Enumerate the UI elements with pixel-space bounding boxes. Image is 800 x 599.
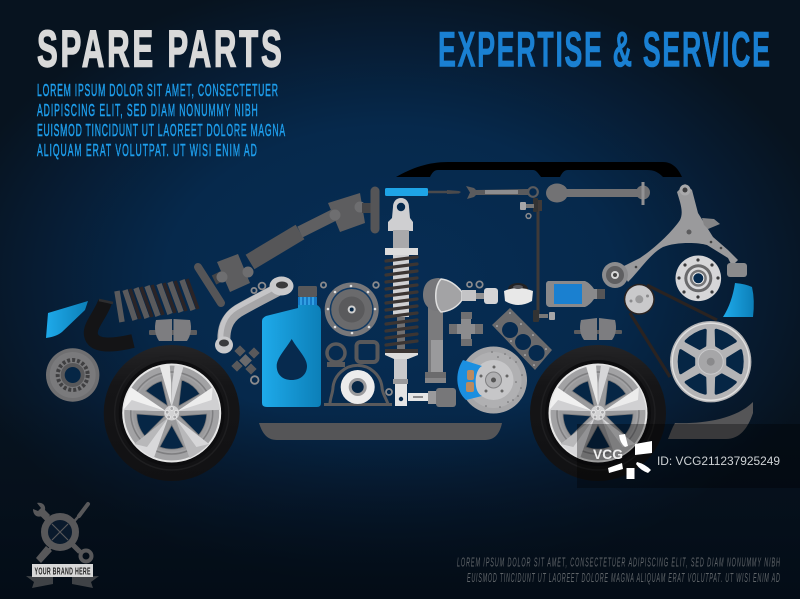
brake pad left bbox=[149, 319, 197, 341]
screwdriver bbox=[385, 188, 461, 196]
brand logo: YOUR BRAND HERE bbox=[34, 564, 91, 577]
brake pad right bbox=[574, 318, 622, 340]
control arm bbox=[602, 184, 747, 288]
wrench bbox=[466, 186, 538, 199]
pitman arm bbox=[215, 276, 294, 354]
clutch disc bbox=[325, 282, 379, 336]
bearing left bbox=[46, 348, 99, 402]
radiator hose bbox=[91, 300, 133, 345]
watermark bbox=[577, 424, 800, 488]
drive belt bbox=[630, 285, 717, 377]
oil bottle bbox=[262, 286, 321, 407]
shock absorber bbox=[385, 198, 418, 406]
intro text block: ADIPISCING ELIT, SED DIAM NONUMMY NIBH bbox=[37, 99, 258, 120]
brake disc and caliper bbox=[457, 346, 527, 414]
intro text block bbox=[37, 79, 286, 160]
bearing support bbox=[324, 365, 392, 406]
brand logo bbox=[26, 503, 99, 588]
coil spring bbox=[117, 279, 198, 322]
head gasket bbox=[492, 308, 552, 370]
footer text: EUISMOD TINCIDUNT UT LAOREET DOLORE MAGNA ALIQUAM ERAT VOLUTPAT. UT WISI ENIM AD bbox=[467, 572, 780, 586]
small washers bbox=[251, 282, 379, 384]
ball joint bbox=[423, 278, 498, 383]
sway link bbox=[520, 198, 555, 322]
footer text: LOREM IPSUM DOLOR SIT AMET, CONSECTETUER ADIPISCING ELIT, SED DIAM NONUMMY NIBH bbox=[457, 556, 780, 570]
omega gasket bbox=[327, 344, 345, 367]
universal joint bbox=[449, 312, 483, 346]
drive shaft bbox=[198, 191, 376, 303]
cv joint bearing bbox=[676, 255, 721, 301]
watermark: ID: VCG211237925249 bbox=[657, 456, 780, 468]
rear fender bbox=[668, 402, 753, 439]
intro text block: LOREM IPSUM DOLOR SIT AMET, CONSECTETUER bbox=[37, 79, 278, 100]
watermark: VCG bbox=[593, 446, 623, 462]
title: spare parts: SPARE PARTS bbox=[37, 20, 282, 79]
big pulley bbox=[670, 321, 751, 402]
intro text block: EUISMOD TINCIDUNT UT LAOREET DOLORE MAGNA bbox=[37, 119, 286, 140]
right blue lamp bbox=[723, 283, 754, 317]
small pulley bbox=[624, 284, 655, 315]
title: expertise and service: EXPERTISE & SERVICE bbox=[438, 22, 770, 78]
rubber bushing bbox=[504, 283, 533, 305]
fluid bottle bbox=[546, 281, 605, 307]
footer text bbox=[457, 556, 780, 586]
sill panel bbox=[259, 423, 502, 440]
square gasket bbox=[356, 342, 378, 362]
cross nut set bbox=[231, 345, 260, 375]
small nuts bbox=[467, 281, 483, 288]
front wheel bbox=[104, 345, 240, 481]
injector nozzle bbox=[386, 388, 456, 407]
car roof bbox=[396, 162, 682, 177]
headlight left bbox=[46, 301, 88, 338]
rear wheel bbox=[530, 345, 666, 481]
tie rod bbox=[546, 182, 650, 205]
intro text block: ALIQUAM ERAT VOLUTPAT. UT WISI ENIM AD bbox=[37, 139, 257, 160]
